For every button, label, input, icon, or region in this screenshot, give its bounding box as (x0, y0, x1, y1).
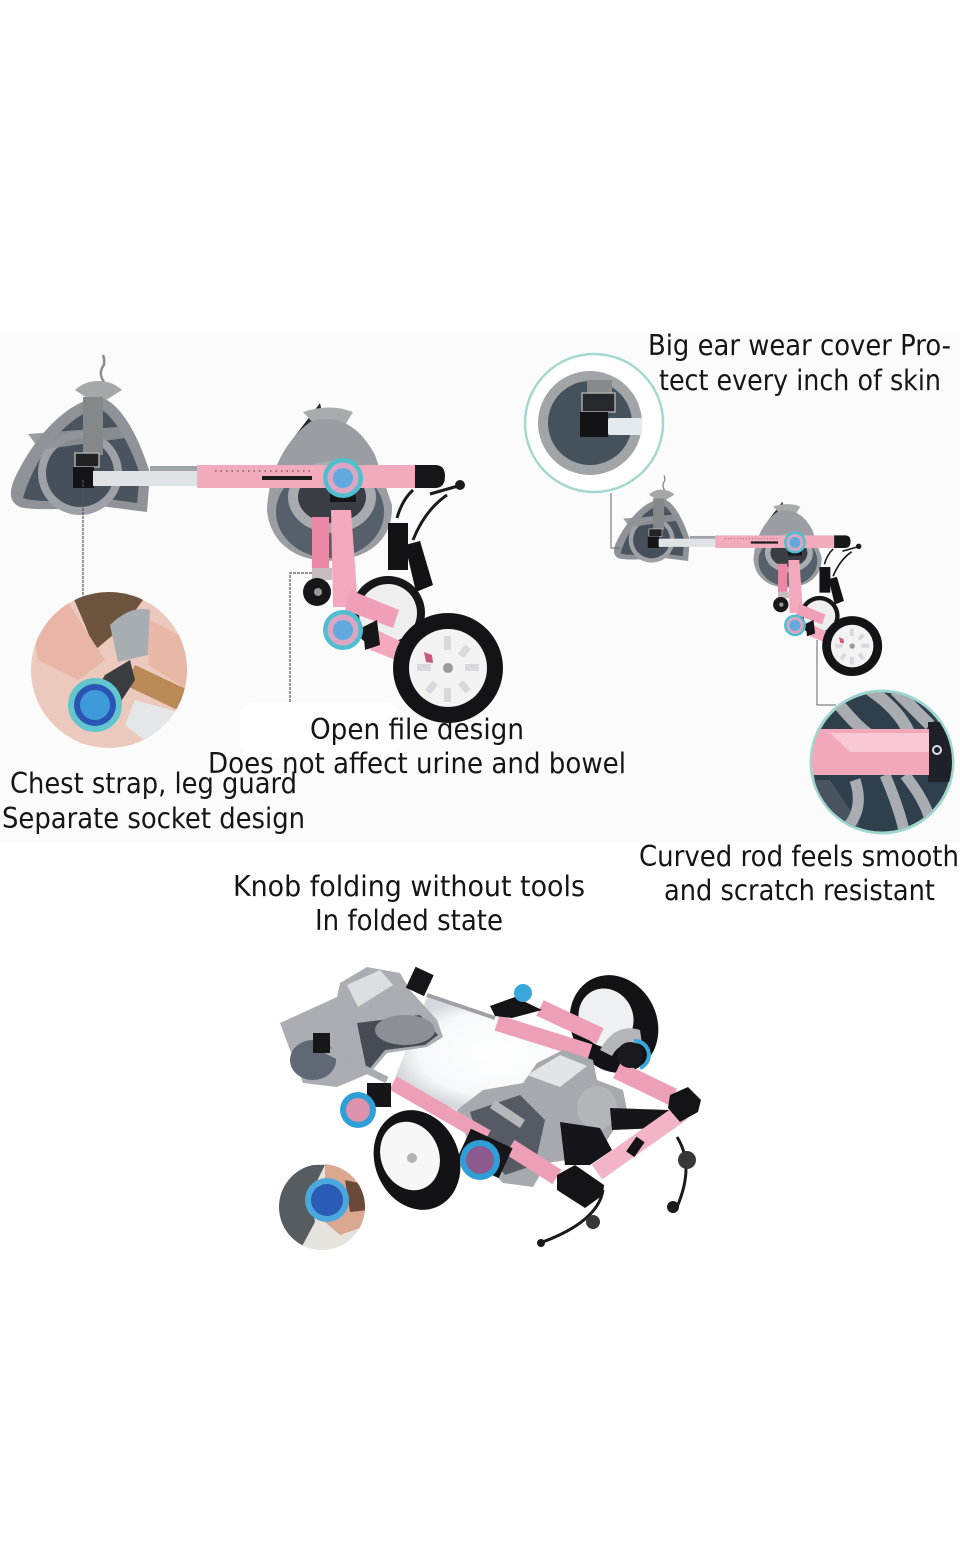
folded wheelchair (280, 961, 701, 1247)
infographic canvas (4, 334, 957, 1250)
label: ear cover (648, 329, 951, 397)
front wheel (359, 1097, 475, 1223)
large wheelchair (11, 355, 503, 723)
strap loop and rear knob (600, 1028, 642, 1056)
mid harness (457, 1050, 627, 1187)
label: knob folding: Knob folding without tools (233, 870, 585, 903)
inset: hand and knob (30, 590, 188, 750)
text backing patch (240, 703, 400, 758)
knobs (367, 1083, 391, 1107)
label: curved rod (639, 840, 959, 907)
label: chest strap: Chest strap, leg guard (10, 767, 297, 800)
label: open file design: Does not affect urine and bowel (208, 747, 626, 780)
top tubes (497, 1023, 590, 1052)
panel tint (0, 332, 960, 842)
label: chest strap (2, 767, 305, 835)
back harness (280, 967, 443, 1087)
inset: knob in hand (278, 1163, 368, 1253)
label: open file design: Open file design (310, 713, 524, 746)
inset: ear cover (525, 354, 663, 492)
callout lines for large wheelchair (83, 480, 312, 703)
label: open file design (208, 713, 626, 780)
clear sheet (393, 997, 603, 1110)
label: chest strap: Separate socket design (2, 802, 305, 835)
front rails (393, 1083, 487, 1137)
small wheelchair (614, 475, 882, 676)
callout lines for small wheelchair (611, 493, 836, 705)
label: knob folding (233, 870, 585, 937)
drawstrings (540, 1137, 686, 1243)
label: knob folding: In folded state (315, 904, 503, 937)
inset: curved rod (810, 690, 953, 840)
label: curved rod: and scratch resistant (664, 874, 935, 907)
back wheel (554, 961, 674, 1087)
